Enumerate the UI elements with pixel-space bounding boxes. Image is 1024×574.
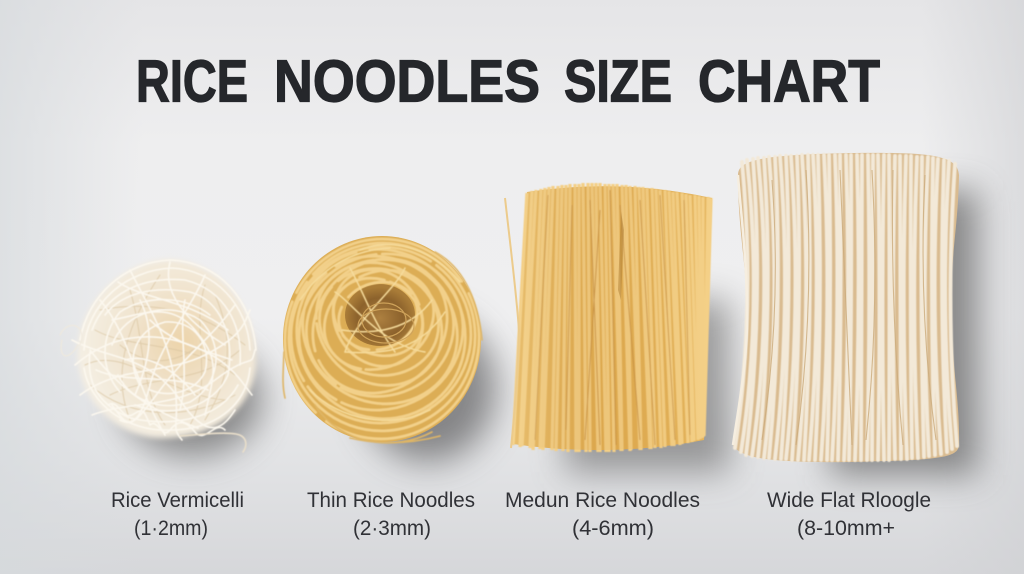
wide noodles dark accents (762, 170, 936, 445)
shadow: vermicelli (122, 340, 262, 456)
label: rice vermicelli (111, 489, 244, 540)
label: medium rice noodles (505, 489, 700, 540)
thin noodles inner coil (358, 303, 414, 343)
vermicelli strands (60, 260, 256, 452)
title: NOODLES (274, 48, 540, 114)
thin noodles rings (262, 215, 502, 457)
label: wide flat noodles (767, 489, 931, 540)
noodle: rice vermicelli nest (60, 260, 262, 456)
medium noodles shading (513, 186, 712, 450)
title: SIZE (564, 48, 672, 114)
medium noodles dark gap (618, 212, 624, 300)
shadow: thin noodles (360, 314, 496, 462)
medium noodles base (513, 186, 712, 450)
thin noodles base (283, 236, 481, 442)
title (136, 48, 880, 114)
noodle: wide flat noodles bundle (733, 153, 978, 475)
label: wide flat noodles: (8-10mm+ (797, 517, 895, 540)
shadow: medium noodles (565, 300, 730, 472)
label: medium rice noodles: (4-6mm) (572, 517, 654, 540)
vermicelli base (78, 260, 256, 438)
label: wide flat noodles: Wide Flat Rloogle (767, 489, 931, 512)
medium noodles strands (513, 183, 711, 452)
label: thin rice noodles: (2·3mm) (353, 517, 431, 540)
label: rice vermicelli: (1·2mm) (134, 517, 208, 540)
wide noodles outline fold (733, 175, 747, 445)
thin noodles hole (345, 284, 415, 346)
label: thin rice noodles: Thin Rice Noodles (307, 489, 475, 512)
label: medium rice noodles: Medun Rice Noodles (505, 489, 700, 512)
wide noodles base (733, 153, 959, 462)
label: thin rice noodles (307, 489, 475, 540)
wide noodles strands (735, 155, 957, 460)
title: RICE (136, 48, 248, 114)
noodle: thin rice noodles nest (262, 215, 502, 462)
shadow: wide noodles (830, 190, 978, 475)
noodle: medium rice noodles bundle (505, 183, 730, 472)
title: CHART (698, 48, 880, 114)
medium noodles stray strand (505, 198, 519, 448)
label: rice vermicelli: Rice Vermicelli (111, 489, 244, 512)
